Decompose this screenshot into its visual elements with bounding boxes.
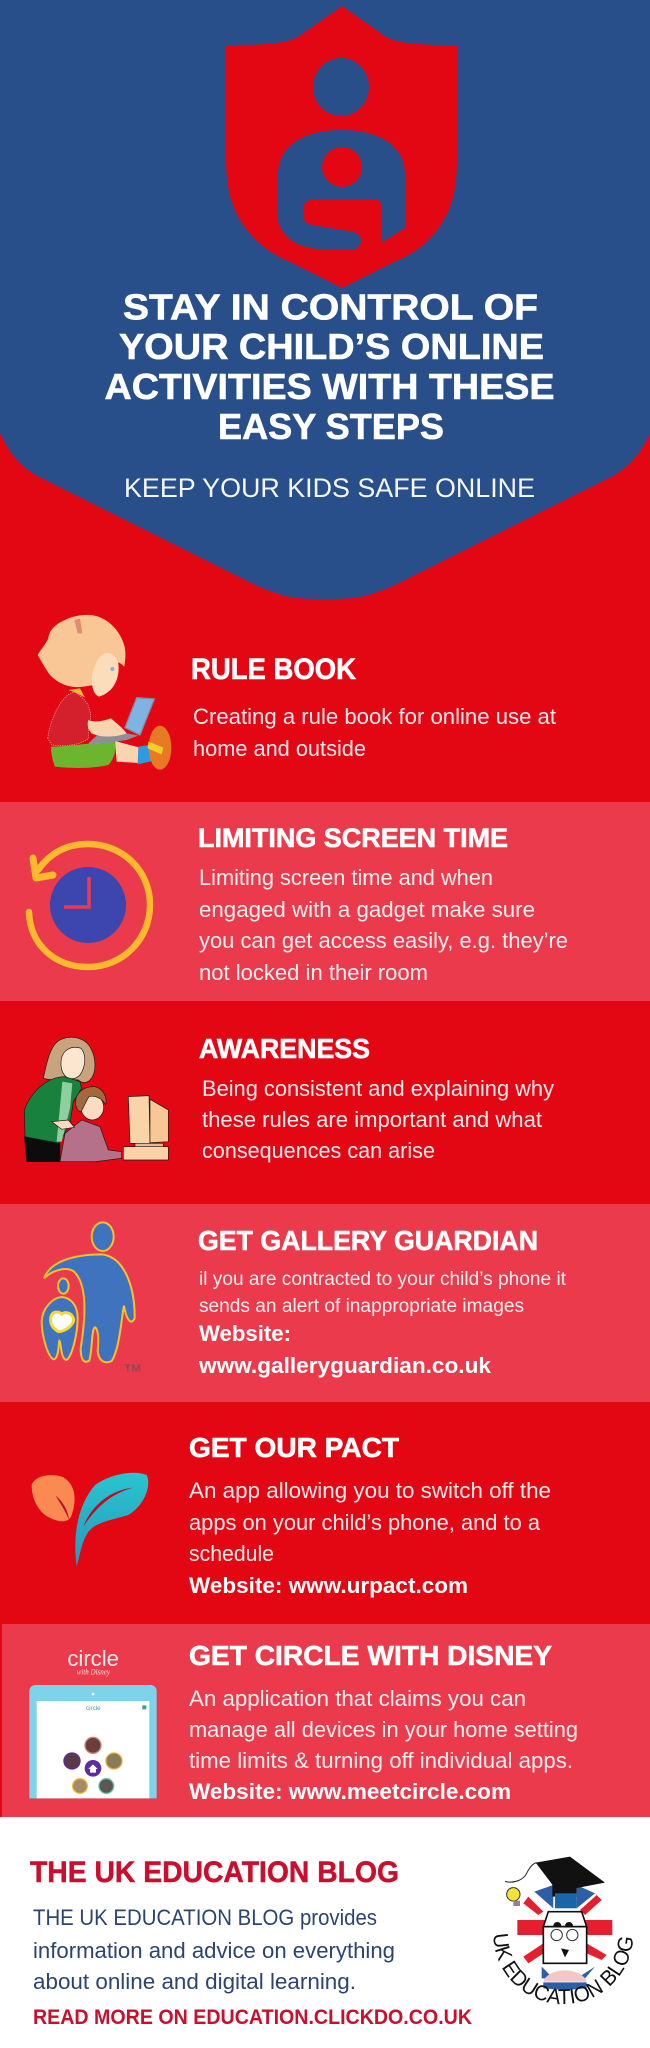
- website link: Website: www.meetcircle.com: [189, 1779, 511, 1804]
- title: EASY STEPS: [218, 406, 444, 447]
- heading: GET OUR PACT: [189, 1432, 399, 1463]
- icon: circle logo and tablet: with Disney: [77, 1666, 110, 1676]
- description: [193, 704, 556, 761]
- panel: our pact: [32, 1432, 551, 1598]
- website link: www.galleryguardian.co.uk: [198, 1353, 492, 1378]
- heading: GET GALLERY GUARDIAN: [198, 1225, 538, 1256]
- panel: gallery guardian: [0, 1204, 650, 1402]
- icon: circle logo and tablet: circle: [67, 1646, 119, 1671]
- header panel: [0, 0, 650, 599]
- icon: child with laptop: [38, 615, 171, 770]
- description: An application that claims you can: [189, 1686, 526, 1711]
- description: [202, 1076, 554, 1163]
- description: [189, 1478, 551, 1566]
- footer description: about online and digital learning.: [33, 1969, 356, 1994]
- description: you can get access easily, e.g. they’re: [199, 928, 568, 953]
- description: not locked in their room: [199, 960, 428, 985]
- description: sends an alert of inappropriate images: [199, 1296, 524, 1317]
- icon: clock with arrow: [29, 844, 150, 967]
- panel: circle with disney: [2, 1624, 650, 1817]
- description: il you are contracted to your child’s phone it: [199, 1269, 567, 1290]
- description: manage all devices in your home setting: [189, 1717, 578, 1742]
- description: schedule: [189, 1541, 274, 1566]
- title: ACTIVITIES WITH THESE: [104, 366, 554, 407]
- description: Being consistent and explaining why: [202, 1076, 554, 1101]
- icon: circle logo and tablet: [29, 1646, 157, 1798]
- panel: footer: [0, 1817, 650, 2048]
- panel: limiting screen time: [0, 802, 650, 1001]
- title: [104, 286, 554, 447]
- icon: pact leaf logo: [32, 1473, 148, 1567]
- description: apps on your child’s phone, and to a: [189, 1510, 541, 1535]
- website link: Website:: [199, 1321, 291, 1346]
- description: engaged with a gadget make sure: [199, 897, 535, 922]
- panel background: [2, 1624, 650, 1817]
- website link: [198, 1321, 492, 1378]
- website link: Website: www.urpact.com: [189, 1573, 468, 1598]
- subtitle: KEEP YOUR KIDS SAFE ONLINE: [124, 473, 535, 503]
- icon: circle logo and tablet: circle: [86, 1705, 101, 1712]
- heading: LIMITING SCREEN TIME: [198, 823, 508, 853]
- description: Limiting screen time and when: [199, 865, 493, 890]
- panel: rule book: [38, 615, 556, 770]
- description: [189, 1686, 578, 1773]
- icon: parent and child at computer: [24, 1037, 168, 1162]
- footer description: [33, 1905, 395, 1994]
- panel: awareness: [24, 1033, 554, 1163]
- icon: UK Education Blog logo: UK EDUCATION BLOG: [494, 1934, 633, 2004]
- heading: RULE BOOK: [191, 653, 356, 686]
- read more link: READ MORE ON EDUCATION.CLICKDO.CO.UK: [33, 2006, 472, 2029]
- description: [199, 865, 568, 985]
- description: An app allowing you to switch off the: [189, 1478, 551, 1503]
- description: consequences can arise: [202, 1138, 435, 1163]
- icon: UK Education Blog logo: [494, 1856, 633, 2004]
- icon: gallery guardian logo: [42, 1222, 141, 1375]
- footer heading: THE UK EDUCATION BLOG: [30, 1856, 399, 1889]
- title: STAY IN CONTROL OF: [123, 286, 538, 328]
- icon: gallery guardian logo: TM: [124, 1364, 141, 1375]
- description: time limits & turning off individual apps.: [189, 1748, 573, 1773]
- panel background: [0, 802, 650, 1001]
- icon: shield with parent and child: [226, 6, 457, 288]
- panel background: [0, 1204, 650, 1402]
- description: Creating a rule book for online use at: [193, 704, 556, 729]
- description: [199, 1269, 567, 1317]
- footer description: THE UK EDUCATION BLOG provides: [33, 1905, 377, 1930]
- heading: AWARENESS: [199, 1033, 370, 1064]
- description: these rules are important and what: [202, 1107, 542, 1132]
- title: YOUR CHILD’S ONLINE: [119, 326, 544, 367]
- blue header shape: [0, 0, 650, 599]
- footer description: information and advice on everything: [33, 1938, 395, 1963]
- heading: GET CIRCLE WITH DISNEY: [189, 1640, 552, 1671]
- description: home and outside: [193, 736, 366, 761]
- footer background: [0, 1817, 650, 2048]
